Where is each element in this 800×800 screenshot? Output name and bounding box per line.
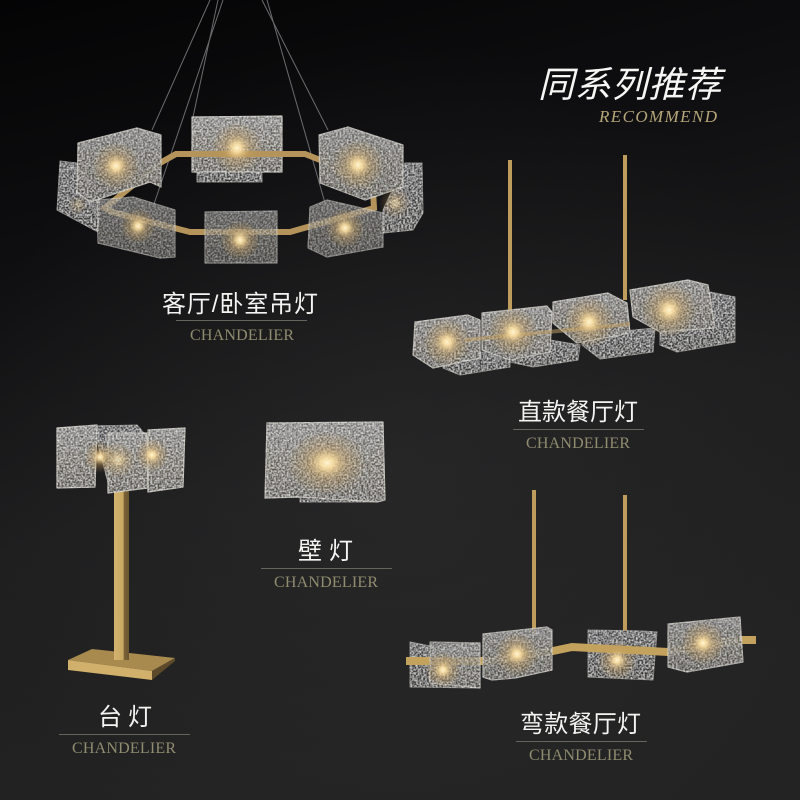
product: straight dining chandelier — [413, 155, 735, 375]
caption: 台灯 — [59, 704, 190, 757]
back glass panels — [410, 630, 657, 688]
caption: 弯款餐厅灯: 弯款餐厅灯 — [520, 711, 641, 738]
brass bar — [465, 322, 630, 342]
title: 同系列推荐: RECOMMEND — [598, 107, 718, 126]
stem — [114, 490, 129, 662]
title: 同系列推荐 — [538, 64, 726, 126]
caption: 弯款餐厅灯: CHANDELIER — [529, 747, 633, 764]
front glass panels — [430, 617, 743, 688]
brass bar — [406, 640, 756, 661]
bulb glow — [287, 431, 367, 495]
shade panels — [57, 425, 185, 493]
suspension cables — [152, 0, 328, 210]
base — [68, 490, 175, 680]
caption: 直款餐厅灯: 直款餐厅灯 — [518, 399, 638, 426]
brass ring — [105, 154, 374, 232]
bulb glows — [84, 438, 169, 478]
caption: 台灯: CHANDELIER — [72, 740, 176, 757]
caption: 客厅/卧室吊灯: CHANDELIER — [190, 327, 294, 344]
product: ring chandelier — [57, 0, 423, 263]
glass panels — [413, 280, 735, 375]
caption: 壁灯: CHANDELIER — [274, 574, 378, 591]
product: table lamp — [57, 425, 185, 680]
caption: 客厅/卧室吊灯: 客厅/卧室吊灯 — [162, 291, 318, 318]
caption: 台灯: 台 灯 — [98, 704, 152, 731]
product: bent dining chandelier — [406, 490, 756, 688]
brass rods — [508, 155, 627, 312]
caption: 壁灯: 壁 灯 — [298, 538, 353, 565]
bulb glows — [425, 621, 725, 688]
caption: 弯款餐厅灯 — [516, 711, 647, 764]
bulb glows — [68, 122, 411, 260]
caption: 直款餐厅灯 — [513, 399, 644, 452]
caption: 客厅/卧室吊灯 — [162, 291, 318, 344]
back glass panels — [57, 116, 423, 233]
caption: 直款餐厅灯: CHANDELIER — [526, 435, 630, 452]
caption: 壁灯 — [261, 538, 392, 591]
product: wall lamp — [265, 422, 385, 502]
brass rods — [532, 490, 627, 645]
title: 同系列推荐: 同系列推荐 — [538, 64, 726, 105]
front glass panels — [77, 127, 403, 263]
bulb glows — [423, 282, 697, 366]
